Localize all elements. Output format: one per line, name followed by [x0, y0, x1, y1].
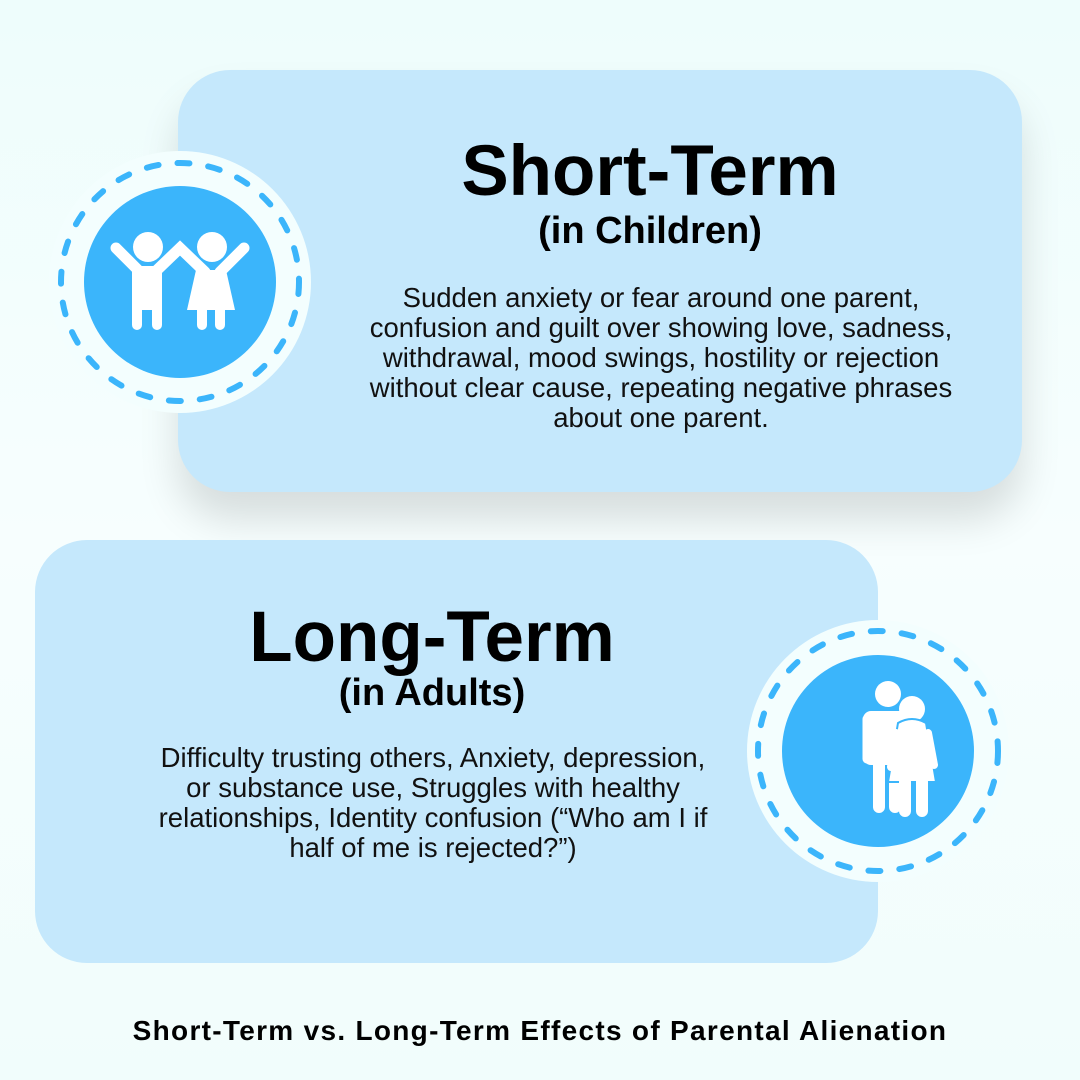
- panel: long-term card: [35, 540, 878, 963]
- text block: short-term effects: without clear cause, repeating negative phrases: [370, 372, 952, 403]
- subheading: in Children: (in Children): [538, 210, 762, 252]
- text block: short-term effects: withdrawal, mood swings, hostility or rejection: [383, 342, 939, 373]
- text block: long-term effects: Difficulty trusting others, Anxiety, depression,: [161, 742, 705, 773]
- text block: short-term effects: about one parent.: [553, 402, 769, 433]
- footer title: Short-Term vs. Long-Term Effects of Parental Alienation: [133, 1015, 947, 1046]
- text block: long-term effects: or substance use, Struggles with healthy: [186, 772, 680, 803]
- text block: short-term effects: Sudden anxiety or fear around one parent,: [403, 282, 919, 313]
- icon: adults: [747, 620, 1001, 882]
- heading: Short-Term: Short-Term: [461, 132, 839, 211]
- text block: long-term effects: relationships, Identity confusion (“Who am I if: [159, 802, 707, 833]
- panel: short-term card: [178, 70, 1022, 492]
- text block: short-term effects: confusion and guilt over showing love, sadness,: [370, 312, 952, 343]
- text block: long-term effects: [159, 742, 708, 863]
- icon: children: [58, 151, 311, 413]
- text block: short-term effects: [370, 282, 952, 433]
- heading: Long-Term: Long-Term: [249, 598, 615, 677]
- text block: long-term effects: half of me is rejected?”): [289, 832, 577, 863]
- subheading: in Adults: (in Adults): [339, 672, 525, 714]
